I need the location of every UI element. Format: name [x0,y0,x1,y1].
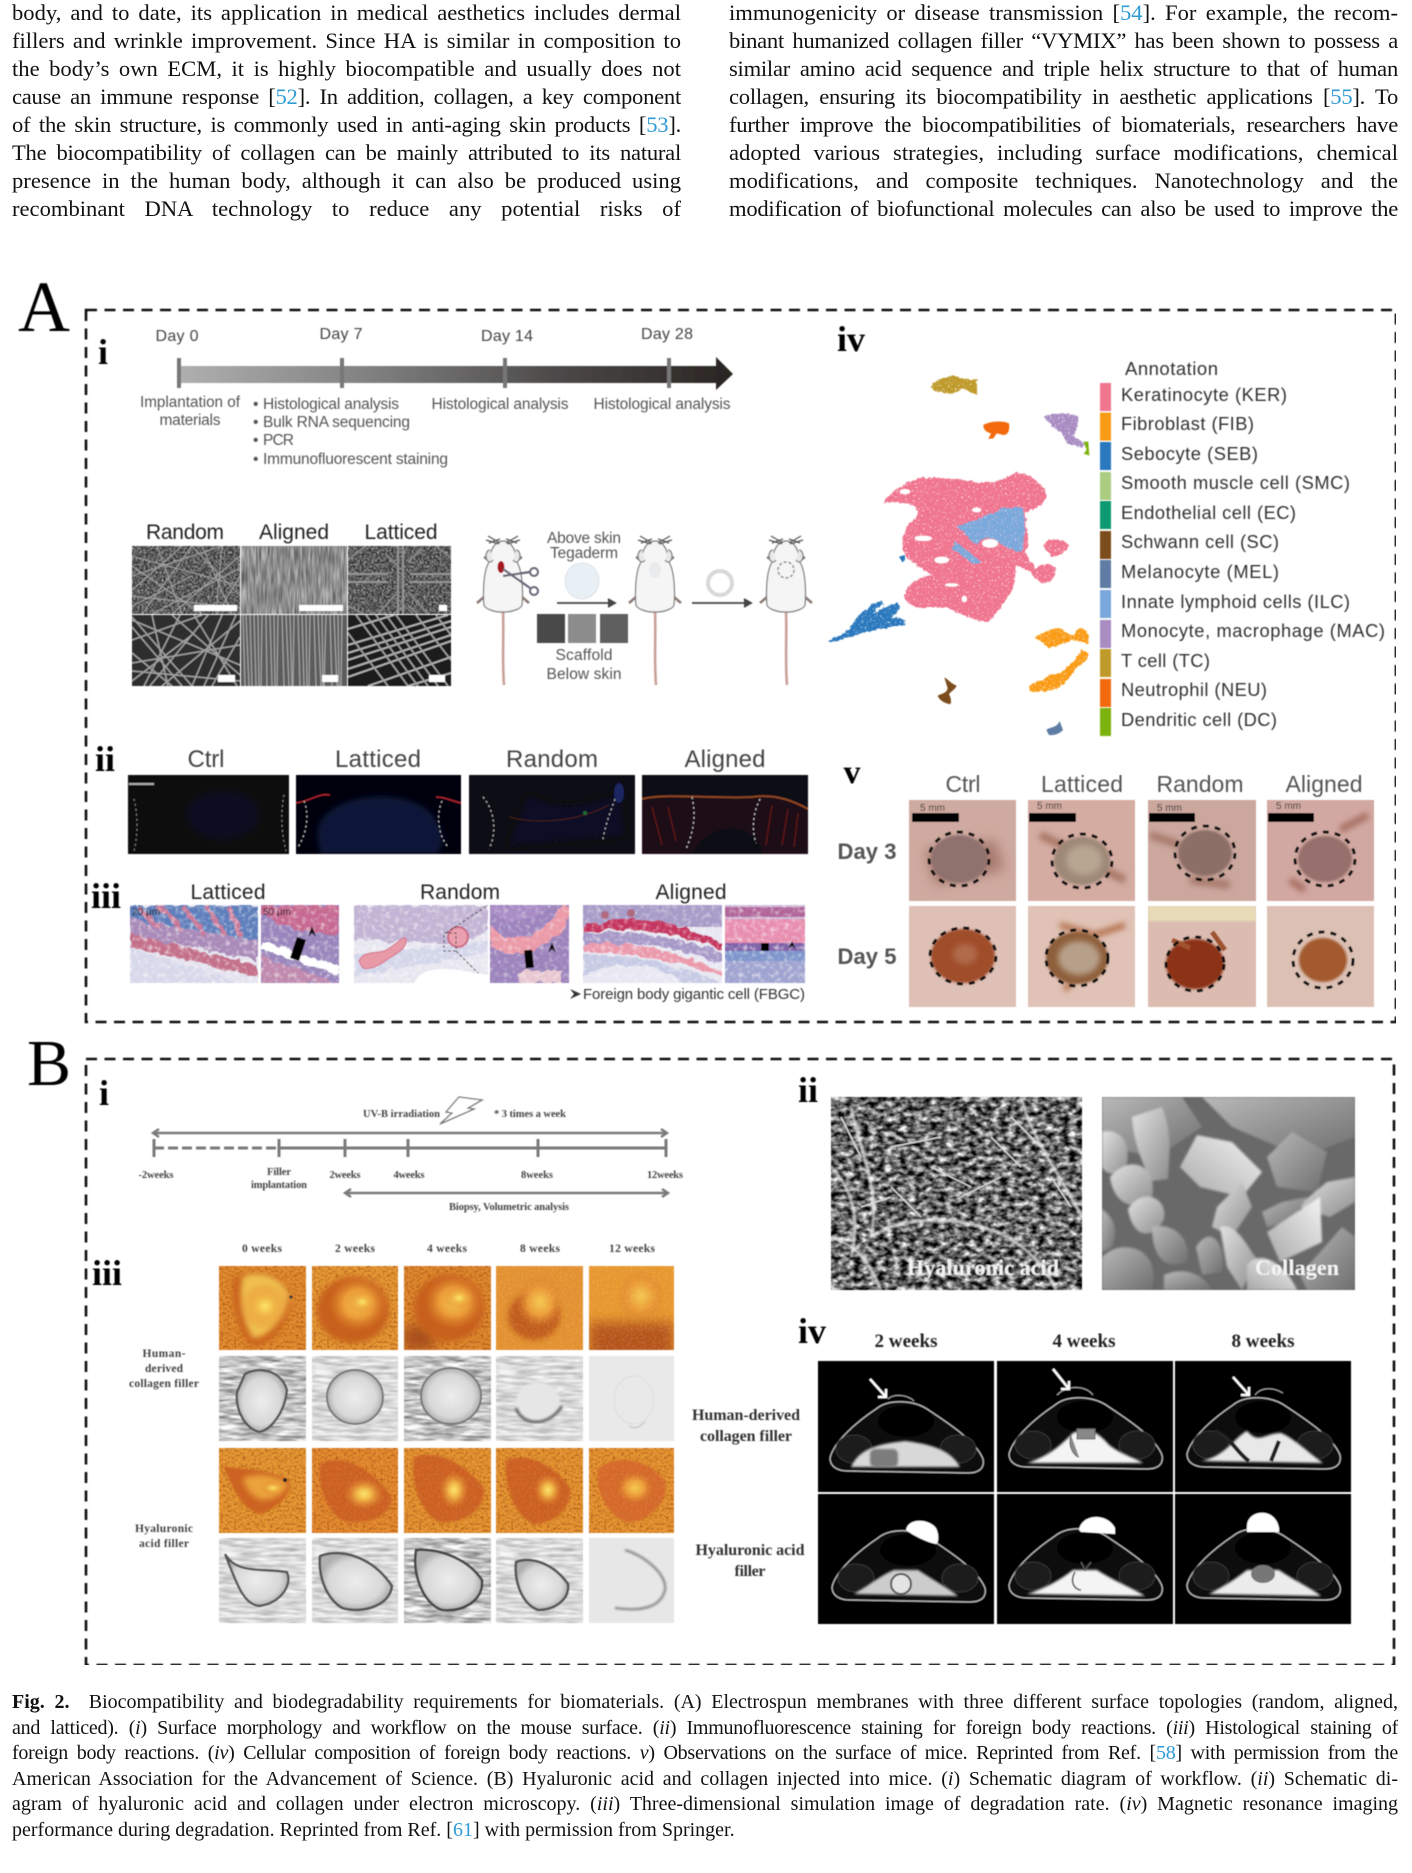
melanocyte cluster [1046,721,1063,735]
figure caption: Fig. 2. Biocompatibility and biodegradability requirements for biomaterials. (A) Electrospun membranes with three different surface topologies (random, aligned, [12,1691,1398,1713]
timeline arrow [177,357,733,390]
colour map 4 weeks [403,1265,492,1351]
neutrophil cluster [983,422,1009,439]
SEM random low magnification [131,545,241,615]
label ii: ii [95,739,115,779]
legend labels [1121,384,1385,730]
sub-panel A iii: histology [91,876,805,1003]
MRI row label collagen [692,1407,800,1445]
panel A dashed frame [86,310,1396,1022]
colour map 0 weeks [218,1265,307,1351]
HA relief 4 weeks [404,1538,491,1623]
wound photo aligned day 5 [1266,906,1374,1008]
UMAP scatter [828,376,1089,735]
scaffold thumbnails [537,614,628,643]
mouse two [629,536,681,685]
wound photo random day 3 [1147,800,1256,902]
fluorescence image latticed [295,774,462,855]
histology titles: Latticed [190,881,266,904]
day labels: Day 14 [481,328,533,345]
MRI column titles: 8 weeks [1232,1331,1294,1352]
immunofluorescence titles: Random [506,746,598,773]
relief 8 weeks [496,1356,584,1442]
timeline labels: 4weeks [394,1170,424,1181]
text block: left body column: recombinant DNA technology to reduce any potential risks of [12,196,681,221]
legend title: Annotation [1125,358,1218,379]
label iii: iii [92,1253,122,1293]
legend labels: Smooth muscle cell (SMC) [1121,472,1350,493]
timeline labels: 8weeks [521,1170,553,1181]
mouse surgery workflow [477,530,812,685]
MRI row label hyaluronic: Hyaluronic acid [696,1542,805,1559]
HA colour map 12 weeks [589,1448,674,1533]
legend labels: Melanocyte (MEL) [1121,561,1279,582]
above skin labels [547,530,621,562]
scaffold SEM grid [132,521,451,686]
SEM column titles [146,521,438,544]
mouse three [760,536,812,685]
lightning icon [440,1097,482,1124]
label i: i [99,1073,109,1113]
fluorescence image random [468,774,636,855]
void inside innate lymphoid cluster [982,539,998,548]
timeline labels: 12weeks [647,1170,683,1181]
innate lymphoid cluster [952,507,1025,565]
label iv: iv [798,1311,826,1351]
collagen relief maps [219,1356,674,1441]
text block: left body column: the body’s own ECM, it is highly biocompatible and usually does not [12,56,681,81]
legend labels: Innate lymphoid cells (ILC) [1121,591,1350,612]
legend labels: Fibroblast (FIB) [1121,413,1254,434]
text block: left body column: The biocompatibility of collagen can be mainly attributed to its natural [12,140,681,165]
macrophage cluster [1043,414,1084,448]
small ILC spot [899,555,905,562]
relief 2 weeks [312,1356,398,1442]
MRI row label hyaluronic: filler [734,1563,766,1580]
label iii: iii [91,876,121,916]
row label hyaluronic: Hyaluronic [135,1523,193,1535]
legend labels: T cell (TC) [1121,650,1210,671]
timeline descriptions: Bulk RNA sequencing [263,414,410,431]
panel A [18,267,1396,1022]
T cell cluster [931,376,977,394]
biopsy double arrow [345,1189,668,1197]
wound photo random day 5 [1148,906,1256,1008]
SEM latticed low magnification [347,545,452,615]
SEM column titles: Aligned [259,521,329,544]
label ii: ii [798,1070,818,1110]
hyaluronic relief maps [219,1538,674,1623]
timeline labels: -2weeks [138,1170,174,1181]
text block: left body column [12,0,681,221]
timeline descriptions: Histological analysis [594,396,731,413]
MRI hyaluronic 2 weeks [818,1494,994,1624]
figure caption [12,1690,1398,1843]
white voids [900,489,981,602]
histology random zoom [489,904,570,984]
ring implant [708,571,732,595]
timeline labels: Filler [267,1167,291,1178]
wound photo ctrl day 3 [908,800,1016,902]
above skin labels: Tegaderm [550,545,618,562]
panel B dashed frame [86,1059,1394,1665]
timeline descriptions: • [253,451,258,468]
MRI hyaluronic 4 weeks [997,1494,1173,1624]
timeline descriptions [140,394,731,468]
day labels [156,326,693,345]
wound photo latticed day 3: 5 mm [1037,801,1062,812]
sub-panel A v: wound photos [838,754,1374,1007]
histology titles: Aligned [656,881,726,904]
timeline descriptions: materials [160,412,221,429]
legend labels: Neutrophil (NEU) [1121,679,1267,700]
sub-panel B ii: electron microscopy [798,1070,1355,1290]
immunofluorescence titles [188,746,766,773]
photo row titles: Day 3 [838,839,896,864]
wound photo latticed day 5 [1028,906,1136,1008]
timeline labels: 2weeks [330,1170,360,1181]
timeline descriptions: • [253,414,258,431]
text block: right body column [729,0,1398,221]
histology titles: Random [420,881,500,904]
above skin labels: Above skin [547,530,621,547]
panel letter A: A [18,267,70,347]
figure caption: performance during degradation. Reprinted from Ref. [61] with permission from Springer. [12,1818,735,1840]
MRI column titles [874,1331,1294,1352]
legend labels: Sebocyte (SEB) [1121,443,1258,464]
photo column titles: Random [1156,771,1244,797]
MRI collagen 8 weeks [1175,1361,1351,1492]
UV-B label: UV-B irradiation [363,1109,440,1120]
HA colour map 8 weeks [496,1448,583,1533]
text block: right body column: immunogenicity or disease transmission [54]. For example, the recom- [729,0,1398,25]
histology latticed overview: 20 μm [132,907,160,918]
relief 12 weeks [589,1356,674,1441]
HA relief 2 weeks [312,1538,398,1623]
SEM latticed high magnification [347,614,452,687]
UV-B double arrow [153,1129,667,1137]
row label hyaluronic: acid filler [139,1538,189,1550]
timeline descriptions: Histological analysis [263,396,399,413]
week headers: 4 weeks [427,1243,468,1255]
HA colour map 0 weeks [218,1447,307,1534]
Schwann cluster [938,678,957,704]
timeline descriptions: • [253,396,258,413]
MRI collagen 4 weeks [997,1361,1173,1492]
week headers [242,1243,656,1255]
SEM hyaluronic acid [830,1096,1083,1291]
sub-panel B iv: MRI [692,1311,1351,1624]
day labels: Day 28 [641,326,693,343]
panel letter B: B [27,1027,71,1100]
wound photo aligned day 3: 5 mm [1276,801,1301,812]
text block: right body column: similar amino acid sequence and triple helix structure to that of human [729,56,1398,81]
wound photo latticed day 3 [1028,800,1136,902]
SEM column titles: Random [146,521,224,544]
week headers: 2 weeks [335,1243,376,1255]
label v: v [844,754,860,791]
day labels: Day 0 [156,328,199,345]
collagen colour maps [219,1266,674,1362]
row label collagen: collagen filler [129,1378,199,1390]
histology random overview [354,904,488,983]
label i: i [98,332,108,372]
MRI row label collagen: Human-derived [692,1407,800,1424]
MRI row label collagen: collagen filler [700,1428,792,1445]
timeline labels: implantation [251,1180,307,1191]
text block: left body column: body, and to date, its application in medical aesthetics includes dermal [12,0,681,25]
relief 0 weeks [218,1356,307,1442]
legend labels: Schwann cell (SC) [1121,531,1279,552]
SEM hyaluronic acid: Hyaluronic acid [907,1255,1059,1280]
sub-panel A iv: UMAP and legend [828,319,1385,736]
photo column titles [946,771,1362,797]
HA colour map 4 weeks [404,1448,491,1533]
timeline labels [138,1167,683,1191]
text block: right body column: further improve the biocompatibilities of biomaterials, researchers have [729,112,1398,137]
histology latticed overview [129,904,259,984]
keratinocyte cluster [883,473,1068,622]
figure caption: American Association for the Advancement of Science. (B) Hyaluronic acid and collagen injected into mice. (i) Schematic diagram of workflow. (ii) Schematic di- [12,1768,1398,1790]
HA relief 0 weeks [219,1538,306,1623]
scaffold labels: Scaffold [556,647,612,664]
wound photo ctrl day 3: 5 mm [920,803,945,814]
MRI row label hyaluronic [696,1542,805,1580]
MRI collagen 2 weeks [818,1361,994,1492]
sub-panel A ii: immunofluorescence [95,739,808,854]
wound photo ctrl day 5 [908,906,1016,1008]
legend labels: Monocyte, macrophage (MAC) [1121,620,1385,641]
timeline descriptions: PCR [263,432,294,449]
colour map 8 weeks [495,1265,584,1351]
text block: left body column: of the skin structure, is commonly used in anti-aging skin products [53]. [12,112,681,137]
colour map 2 weeks [311,1265,399,1351]
SEM aligned low magnification [240,545,348,615]
arrow two [692,599,751,607]
tegaderm oval [565,563,599,599]
figure caption: and latticed). (i) Surface morphology and workflow on the mouse surface. (ii) Immunofluorescence staining for foreign body reactions. (iii) Histological staining of [12,1716,1398,1738]
text block: right body column: modification of biofunctional molecules can also be used to improve the [729,196,1398,221]
frequency note: * 3 times a week [494,1109,566,1120]
fluorescence image ctrl [127,774,290,855]
week headers: 12 weeks [609,1243,656,1255]
biopsy label: Biopsy, Volumetric analysis [449,1202,569,1213]
figure caption: foreign body reactions. (iv) Cellular composition of foreign body reactions. v) Observations on the surface of mice. Reprinted from Ref. [58] with permission from the [12,1742,1398,1764]
row label collagen [129,1348,199,1390]
text block: right body column: binant humanized collagen filler “VYMIX” has been shown to possess a [729,28,1398,53]
row label hyaluronic [135,1523,193,1550]
SEM column titles: Latticed [364,521,438,544]
text block: right body column: adopted various strategies, including surface modifications, chemical [729,140,1398,165]
histology latticed zoom: 50 μm [263,907,291,918]
legend labels: Keratinocyte (KER) [1121,384,1287,405]
hyaluronic colour maps [219,1448,674,1533]
row label collagen: Human- [142,1348,186,1360]
scaffold labels: Below skin [546,666,622,683]
immunofluorescence titles: Latticed [335,746,421,773]
SEM random high magnification [131,614,241,687]
sub-panel B i: workflow timeline [99,1073,683,1213]
SEM collagen [1101,1096,1356,1291]
legend labels: Endothelial cell (EC) [1121,502,1296,523]
week headers: 8 weeks [520,1243,561,1255]
scaffold labels [546,647,622,683]
mouse one with scissors [477,536,538,685]
photo column titles: Latticed [1041,771,1123,797]
relief 4 weeks [403,1356,492,1442]
histology aligned zoom [724,904,806,984]
panel B [27,1027,1394,1665]
HA colour map 2 weeks [311,1447,399,1534]
MRI column titles: 4 weeks [1052,1331,1116,1352]
timeline descriptions: Implantation of [140,394,241,411]
text block: left body column: cause an immune response [52]. In addition, collagen, a key component [12,84,681,109]
arrow one [557,599,615,607]
MRI hyaluronic 8 weeks [1175,1494,1351,1624]
SEM collagen: Collagen [1255,1255,1339,1280]
day labels: Day 7 [320,326,363,343]
fibroblast clusters [1029,628,1089,692]
legend swatches [1100,383,1111,736]
week headers: 0 weeks [242,1243,283,1255]
MRI column titles: 2 weeks [874,1331,938,1352]
timeline scale [154,1139,666,1157]
HA relief 12 weeks [589,1538,674,1623]
photo row titles: Day 5 [838,944,896,969]
photo row titles [838,839,896,969]
immunofluorescence titles: Ctrl [188,746,224,773]
HA relief 8 weeks [496,1538,583,1623]
colour map 12 weeks [588,1265,675,1351]
photo column titles: Aligned [1286,771,1362,797]
SEM aligned high magnification [240,614,348,687]
text block: right body column: modifications, and composite techniques. Nanotechnology and the [729,168,1398,193]
immunofluorescence titles: Aligned [684,746,766,773]
legend labels: Dendritic cell (DC) [1121,709,1277,730]
sebocyte cluster [828,600,906,642]
text block: left body column: presence in the human body, although it can also be produced using [12,168,681,193]
timeline descriptions: Histological analysis [432,396,569,413]
histology aligned overview [582,904,723,984]
timeline descriptions: Immunofluorescent staining [263,451,448,468]
dendritic cluster [1083,442,1089,456]
histology latticed zoom [260,904,340,984]
photo column titles: Ctrl [946,771,980,797]
histology titles [190,881,726,904]
wound photo random day 3: 5 mm [1157,803,1182,814]
sub-panel B iii: volumetric images [92,1243,674,1623]
text block: left body column: fillers and wrinkle improvement. Since HA is similar in composition to [12,28,681,53]
FBGC legend: Foreign body gigantic cell (FBGC) [583,986,805,1003]
fluorescence image aligned [641,774,809,855]
figure caption: agram of hyaluronic acid and collagen under electron microscopy. (iii) Three-dimensional simulation image of degradation rate. (iv) Magnetic resonance imaging [12,1793,1398,1815]
row label collagen: derived [145,1363,184,1375]
timeline descriptions: • [253,432,258,449]
label iv: iv [837,319,865,359]
sub-panel A i: timeline [98,326,733,468]
text block: right body column: collagen, ensuring its biocompatibility in aesthetic applications [55]. To [729,84,1398,109]
wound photo aligned day 3 [1266,800,1374,902]
